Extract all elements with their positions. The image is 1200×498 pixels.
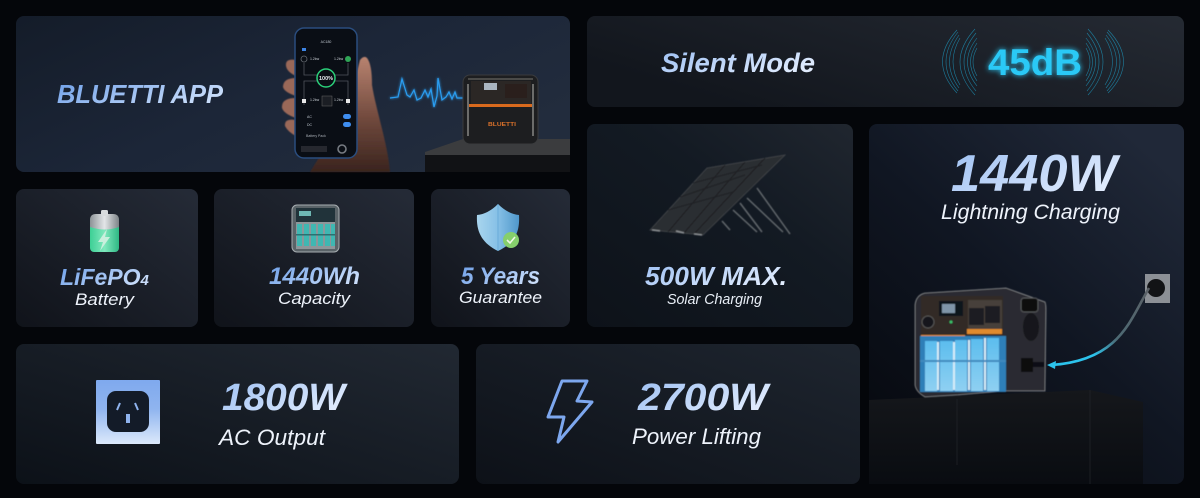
solar panel illustration [650,155,790,235]
phone with app screen [295,28,357,158]
phone with app screen: AC [307,115,312,119]
value: LiFePO4: LiFePO4 [60,264,150,290]
value: 500W MAX.: 500W MAX. [645,261,787,291]
table [425,139,570,172]
icon: sound waves right [1086,29,1124,95]
phone with app screen: Battery Pack [306,134,326,138]
label: AC Output: AC Output [217,425,326,450]
phone with app screen: AC180 [321,40,331,44]
panel: Lightning Charging [869,124,1184,484]
value: 45dB: 45dB [988,42,1082,83]
panel: Solar Charging [587,124,853,327]
panel: BLUETTI APP [16,16,570,172]
panel: 5 Years Guarantee [431,189,570,327]
label: Guarantee: Guarantee [459,288,542,307]
wall socket [1145,274,1170,303]
label: Capacity: Capacity [278,289,352,308]
label: Power Lifting: Power Lifting [632,424,762,449]
panel: LiFePO4 Battery [16,189,198,327]
phone with app screen: DC [307,123,313,127]
icon: AC socket [96,380,160,444]
phone with app screen: 1.2kw [334,98,344,102]
icon: lightning bolt [548,381,592,442]
arrow: charging cable [1047,288,1149,369]
value: 1440W: 1440W [951,145,1121,203]
value: 5 Years: 5 Years [461,263,540,290]
phone with app screen: 1.2kw [334,57,344,61]
hand holding phone [282,57,390,172]
icon: battery pack cutaway [292,205,339,252]
BLUETTI power station: BLUETTI [488,122,517,128]
icon: shield with check [477,204,519,251]
panel: 1440Wh Capacity [214,189,414,327]
label: Lightning Charging: Lightning Charging [941,201,1120,224]
platform [869,390,1143,484]
heading: Silent Mode: Silent Mode [661,48,815,78]
panel: AC Output [16,344,459,484]
BLUETTI power station [463,75,538,144]
value: 2700W: 2700W [637,377,771,419]
value: 1800W: 1800W [222,377,348,419]
phone with app screen: 1.2kw [310,57,320,61]
label: Battery: Battery [75,290,136,309]
phone with app screen: 100% [319,76,333,82]
heartbeat signal line [390,78,463,107]
power station with battery cells [915,288,1046,397]
panel: Silent Mode [587,16,1184,107]
panel: Power Lifting [476,344,860,484]
icon: green battery [90,210,119,252]
value: 1440Wh: 1440Wh [269,263,360,290]
label: Solar Charging: Solar Charging [667,291,763,308]
icon: sound waves left [942,29,977,95]
heading: BLUETTI APP: BLUETTI APP [57,79,224,109]
phone with app screen: 1.2kw [310,98,320,102]
